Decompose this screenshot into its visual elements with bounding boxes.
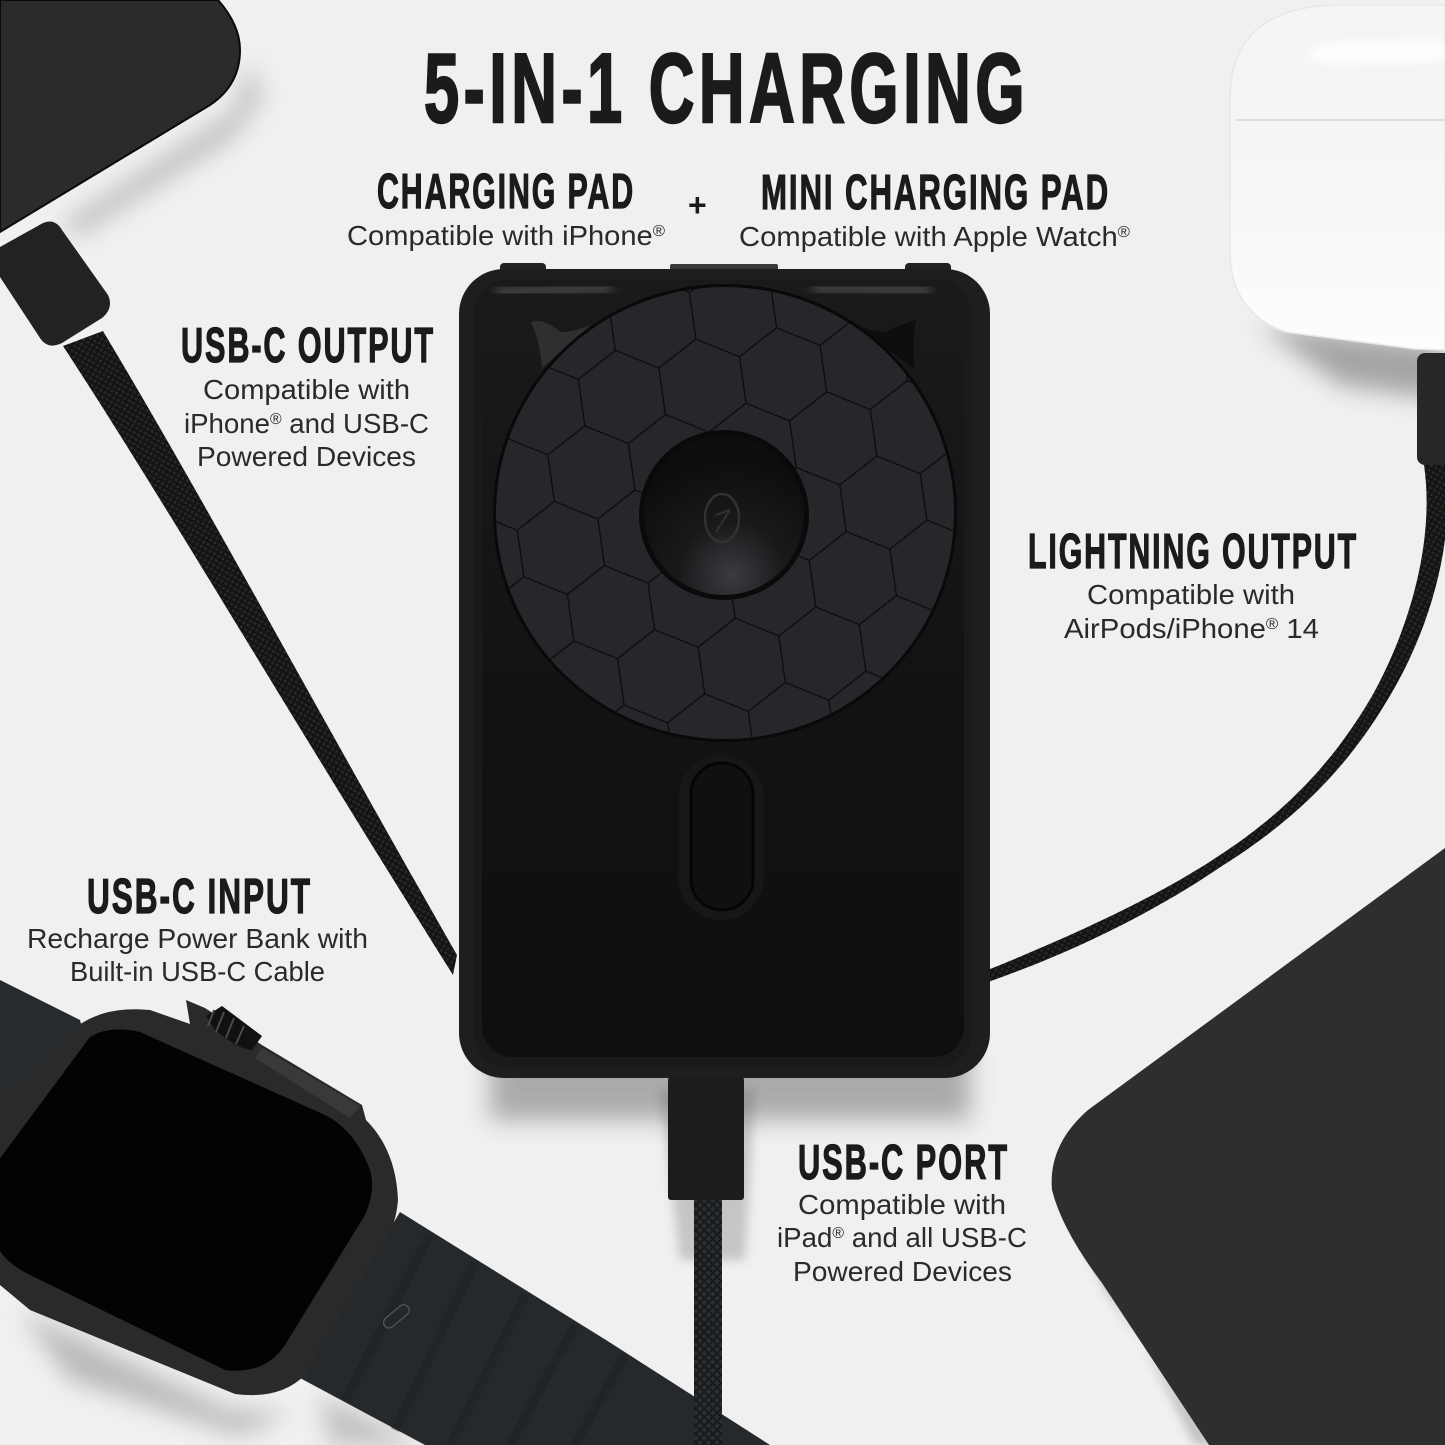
braided USB-C output cable (63, 331, 457, 975)
lightning connector (1417, 353, 1445, 465)
label: USB-C output: and USB-C (282, 408, 429, 439)
corner ears (531, 321, 592, 368)
phone body (0, 0, 240, 232)
label: lightning output: ® (1266, 616, 1278, 633)
phone with USB-C cable (0, 0, 457, 975)
bottom USB-C cable (660, 1090, 755, 1445)
label: USB-C input: Recharge Power Bank with (27, 923, 368, 954)
top port tab (670, 264, 778, 280)
label: charging pad: ® (653, 223, 665, 240)
label: mini charging pad: MINI CHARGING PAD (761, 166, 1110, 220)
label: USB-C output: Powered Devices (197, 441, 416, 472)
label: charging pad: CHARGING PAD (377, 165, 635, 219)
label: USB-C port: ® (832, 1225, 844, 1242)
title: 5-IN-1 CHARGING (424, 33, 1029, 143)
label: USB-C port: and all USB-C (844, 1222, 1027, 1253)
outer shell (459, 269, 990, 1078)
label: USB-C output (181, 319, 435, 472)
label: USB-C input (27, 870, 368, 987)
mini watch charging puck (639, 430, 809, 600)
label: mini charging pad: Compatible with Apple Watch (739, 221, 1102, 252)
USB-C connector (0, 222, 110, 346)
tablet corner (1052, 848, 1445, 1445)
label: lightning output: 14 (1278, 613, 1319, 644)
top highlights (496, 288, 930, 292)
label: USB-C port: iPad (777, 1222, 833, 1253)
label: charging pad (347, 165, 665, 251)
USB-C connector (668, 1077, 744, 1200)
label: USB-C input: Built-in USB-C Cable (70, 956, 325, 987)
label: lightning output: Compatible with (1087, 579, 1295, 610)
smartwatch (0, 980, 770, 1445)
top corner bumps (500, 263, 546, 277)
AirPods case with lightning cable (985, 5, 1445, 982)
label: mini charging pad (739, 166, 1130, 252)
plus sign: + (688, 187, 707, 223)
label: mini charging pad: ® (1118, 224, 1130, 241)
label: USB-C input: USB-C INPUT (87, 870, 312, 924)
label: USB-C port: USB-C PORT (798, 1136, 1009, 1190)
label: charging pad: Compatible with iPhone (347, 220, 641, 251)
inner body (473, 279, 972, 1068)
label: USB-C output: USB-C OUTPUT (181, 319, 435, 373)
AirPods case (1230, 5, 1445, 350)
label: USB-C port: Powered Devices (793, 1256, 1012, 1287)
label: lightning output: AirPods/iPhone (1064, 613, 1257, 644)
label: USB-C output: iPhone (184, 408, 271, 439)
watch crown (206, 1006, 262, 1050)
label: USB-C output: Compatible with (203, 374, 410, 405)
label: USB-C port: Compatible with (798, 1189, 1006, 1220)
label: USB-C port (777, 1136, 1027, 1287)
watch band (0, 980, 90, 1200)
braided cable (694, 1195, 722, 1445)
label: lightning output (1028, 525, 1358, 644)
watch screen (0, 1029, 372, 1371)
power button (678, 755, 764, 920)
lightning cable (985, 465, 1445, 982)
watch case (0, 1000, 398, 1395)
label: USB-C output: ® (270, 411, 282, 428)
magnetic charging disc with hexagon texture (490, 280, 960, 750)
power bank (459, 263, 990, 1200)
